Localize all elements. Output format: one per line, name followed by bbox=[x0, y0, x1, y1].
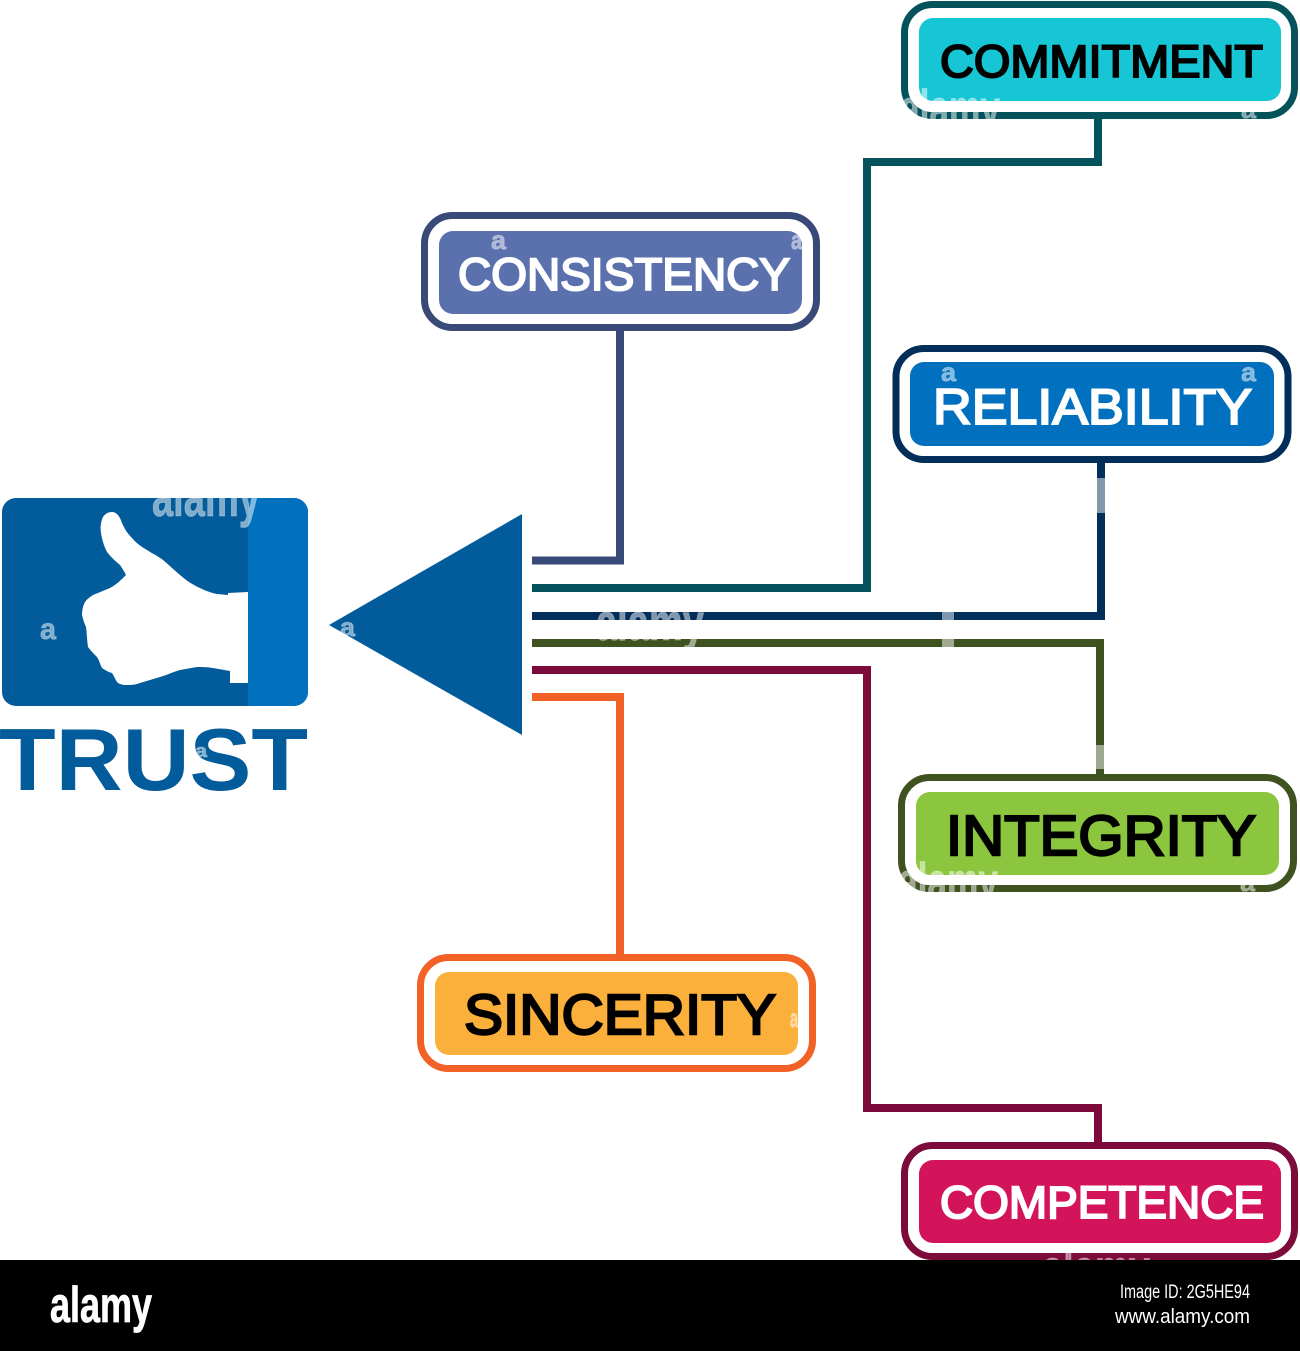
connector: competence bbox=[532, 670, 1098, 1142]
box: sincerity bbox=[420, 958, 812, 1068]
title: TRUST: TRUST bbox=[0, 710, 308, 809]
watermark letter on triangle: a bbox=[340, 612, 356, 642]
watermark strips on connector lines bbox=[942, 478, 1106, 769]
watermark: alamy bbox=[900, 80, 1000, 138]
box: integrity bbox=[898, 774, 1297, 892]
watermark: a bbox=[1240, 867, 1256, 897]
connector: integrity bbox=[532, 643, 1100, 774]
box: reliability bbox=[896, 348, 1288, 460]
fill panel bbox=[910, 362, 1274, 446]
connector: reliability bbox=[532, 463, 1101, 616]
connector: sincerity bbox=[532, 697, 620, 954]
fill panel bbox=[919, 1160, 1281, 1243]
fill panel bbox=[916, 792, 1279, 875]
label: CONSISTENCY bbox=[458, 249, 790, 300]
watermark: alamy bbox=[898, 853, 998, 911]
fill panel bbox=[439, 231, 802, 314]
watermark letters bbox=[491, 225, 802, 255]
watermark letters: a bbox=[791, 225, 802, 255]
icon: thumbs up bbox=[82, 512, 248, 685]
watermark on connector lines: alamy bbox=[596, 594, 704, 652]
watermark letters bbox=[941, 357, 1257, 387]
watermark: alamy bbox=[1042, 1240, 1150, 1296]
box: commitment bbox=[901, 1, 1298, 119]
trust icon card bbox=[2, 498, 308, 706]
fill panel bbox=[919, 18, 1281, 101]
footer logo: alamy bbox=[50, 1277, 152, 1333]
watermark letter on title: a bbox=[195, 741, 208, 761]
connector: commitment bbox=[532, 119, 1098, 588]
watermark: a bbox=[1241, 94, 1257, 124]
watermark letters: a bbox=[941, 357, 957, 387]
label: SINCERITY bbox=[464, 983, 776, 1047]
card light band bbox=[248, 498, 308, 706]
watermark bbox=[904, 88, 1257, 119]
label: RELIABILITY bbox=[933, 379, 1252, 435]
connector: consistency bbox=[532, 331, 620, 560]
footer bar bbox=[0, 1260, 1300, 1351]
watermark letters: a bbox=[491, 225, 507, 255]
image id: Image ID: 2G5HE94 bbox=[1120, 1282, 1250, 1303]
arrow: triangle pointing to trust bbox=[329, 514, 522, 735]
watermark bbox=[901, 861, 1256, 892]
website: www.alamy.com bbox=[1114, 1306, 1250, 1328]
watermark letter: a bbox=[790, 1003, 798, 1033]
fill panel bbox=[435, 972, 798, 1055]
card watermark: alamy bbox=[152, 465, 260, 528]
label: COMMITMENT bbox=[940, 36, 1263, 87]
box: consistency bbox=[424, 216, 816, 328]
label: INTEGRITY bbox=[946, 804, 1256, 868]
box: competence bbox=[901, 1142, 1298, 1260]
label: COMPETENCE bbox=[940, 1177, 1264, 1228]
watermark letters: a bbox=[1241, 357, 1257, 387]
watermark letter: a bbox=[40, 613, 56, 646]
